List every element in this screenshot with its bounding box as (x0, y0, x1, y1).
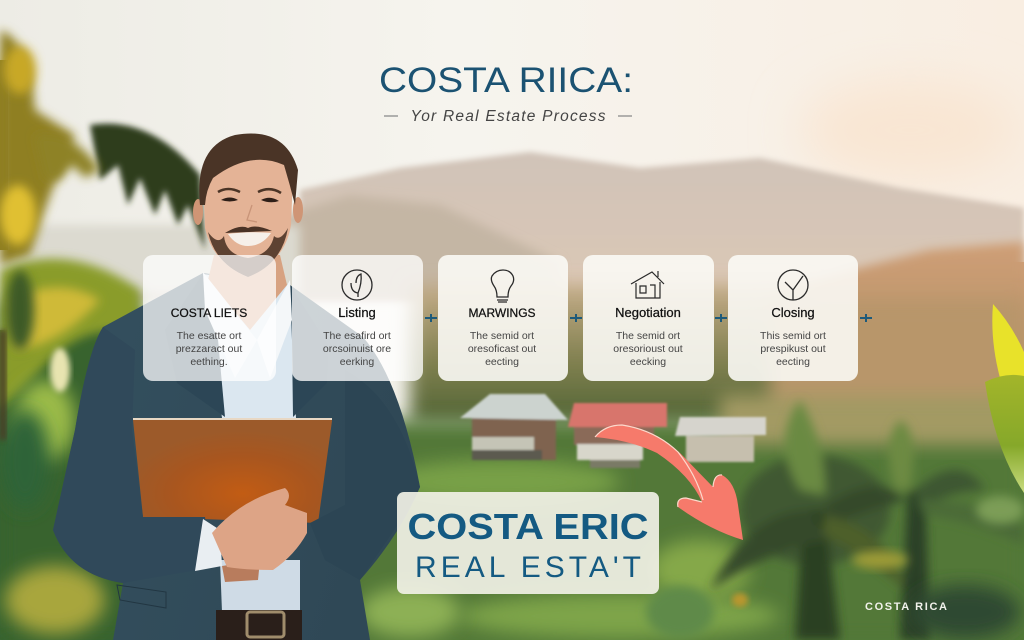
ears (193, 199, 203, 225)
card: Listing: orcsoinuist ore (323, 343, 391, 355)
card: Closing: This semid ort (760, 330, 826, 342)
neck (208, 255, 287, 330)
card: Listing: eerking (340, 356, 374, 368)
background: left palm trees (0, 30, 205, 640)
smile (228, 232, 271, 246)
collar (203, 272, 257, 378)
card: Negotiation (583, 255, 714, 381)
card: Costa Liets: COSTA LIETS (171, 306, 247, 320)
beard (208, 228, 288, 277)
icon: check in circle (778, 270, 808, 300)
belt (216, 610, 302, 640)
card: Marwings (438, 255, 568, 381)
card: Costa Liets: prezzaract out (176, 343, 242, 355)
lower hand (222, 560, 260, 582)
jacket lapels (165, 274, 225, 417)
icon: house (631, 271, 664, 298)
shirt cuff (195, 519, 222, 571)
icon: hand in circle (342, 270, 372, 300)
brand panel: Costa Eric Real Estate (397, 492, 659, 594)
shirt (203, 274, 296, 418)
suit jacket (53, 273, 420, 640)
leaf at right edge (985, 304, 1024, 493)
brand panel: Costa Eric Real Estate: COSTA ERIC (408, 506, 648, 547)
card: Closing (728, 255, 858, 381)
card: Costa Liets: eething. (190, 356, 228, 368)
card: Marwings: oresoficast out (468, 343, 536, 355)
near sleeve (310, 370, 420, 580)
card: Closing: prespikust out (760, 343, 826, 355)
subtitle: Yor Real Estate Process (410, 108, 606, 125)
card: Marwings: The semid ort (470, 330, 534, 342)
arrow connector 1 (425, 314, 437, 322)
card: Closing: Closing (771, 305, 815, 320)
hair (199, 133, 298, 205)
card: Listing (292, 255, 423, 381)
card: Negotiation: The semid ort (616, 330, 680, 342)
brand panel: Costa Eric Real Estate: REAL ESTA'T (415, 551, 641, 584)
moustache (225, 227, 272, 233)
card: Costa Liets: The esatte ort (177, 330, 241, 342)
card: Listing: The esafird ort (323, 330, 391, 342)
card: Negotiation: oresorioust out (613, 343, 683, 355)
eyes and brows (221, 198, 279, 202)
background: right palm trees (646, 400, 1024, 640)
card: Listing: Listing (338, 305, 376, 320)
card: Costa Liets (143, 255, 276, 381)
title: COSTA RIICA: (379, 61, 633, 100)
arrow connector 4 (860, 314, 872, 322)
nose (247, 205, 257, 222)
hand (212, 488, 307, 570)
card: Closing: eecting (776, 356, 810, 368)
card: Marwings: eecting (485, 356, 519, 368)
background: blurred houses (460, 394, 766, 468)
laptop (133, 418, 332, 523)
person with laptop (53, 133, 420, 640)
icon: light bulb (491, 270, 514, 302)
card: Negotiation: Negotiation (615, 305, 681, 320)
head (203, 148, 293, 277)
arrow connector 2 (570, 314, 582, 322)
card: Negotiation: eecking (630, 356, 666, 368)
far sleeve (53, 327, 213, 583)
watermark: COSTA RICA (865, 601, 947, 613)
sleeve button pocket (117, 585, 166, 608)
arrow connector 3 (715, 314, 727, 322)
card: Marwings: MARWINGS (468, 306, 536, 320)
coral curved arrow (595, 425, 743, 540)
